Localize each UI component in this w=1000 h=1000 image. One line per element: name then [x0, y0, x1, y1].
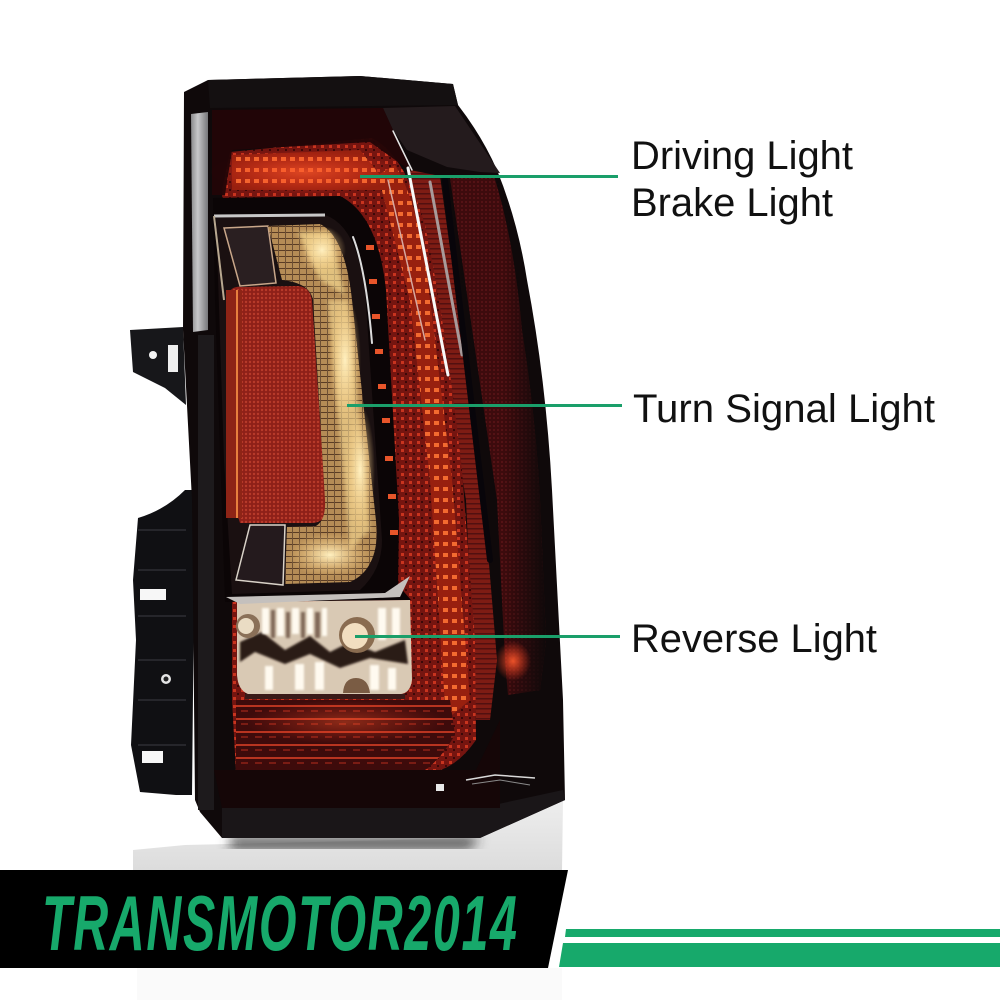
lower dark fade [214, 720, 500, 808]
bottom lip [222, 790, 565, 838]
lens bottom bright strip [245, 694, 405, 699]
label: driving light: Driving Light [631, 134, 853, 178]
icon: reverse bulb [339, 617, 375, 653]
glow: outer tail lamp [495, 641, 531, 681]
dark upper glass [224, 226, 276, 286]
white accent lines [353, 131, 490, 560]
lens dark wave [240, 632, 408, 668]
icon: lower bulb [343, 678, 370, 693]
icon: lower bracket [131, 490, 195, 795]
green stripes [559, 929, 1000, 967]
icon: upper bracket [130, 327, 186, 405]
label: brake light: Brake Light [631, 181, 833, 225]
turn signal strip [268, 224, 377, 584]
callout: turn signal light [347, 387, 935, 431]
bright LED column [378, 165, 470, 720]
tail light housing [183, 76, 565, 838]
floor reflection [133, 800, 563, 1000]
icon: left bulb [236, 614, 260, 638]
band top dark edge [212, 108, 412, 195]
label: reverse light: Reverse Light [631, 617, 877, 661]
dark lower glass [236, 525, 285, 585]
bottom right highlight [466, 775, 535, 785]
lens streaks [262, 608, 400, 690]
lamp mounting brackets [130, 327, 195, 795]
label: turn signal light: Turn Signal Light [633, 387, 935, 431]
smoked upper right glass [383, 106, 500, 173]
upper bright block [232, 150, 392, 190]
red reflector [226, 286, 326, 523]
top lip [208, 76, 458, 108]
brand name: TRANSMOTOR2014 [42, 879, 517, 967]
inner module frame [213, 196, 411, 602]
outer red strip [450, 176, 546, 695]
callout: reverse light [355, 617, 877, 661]
small white clip [436, 784, 444, 791]
dark left edge [198, 335, 214, 810]
brand banner [0, 870, 568, 968]
turn signal LEDs: small red dashes [366, 245, 398, 535]
middle red strip [410, 170, 497, 720]
chrome left edge [191, 112, 208, 332]
lower rows [236, 700, 455, 770]
callout: driving and brake light [360, 134, 853, 178]
reverse light lens [226, 576, 412, 694]
stop lamp red band [210, 108, 476, 772]
lens chrome top [226, 576, 410, 604]
